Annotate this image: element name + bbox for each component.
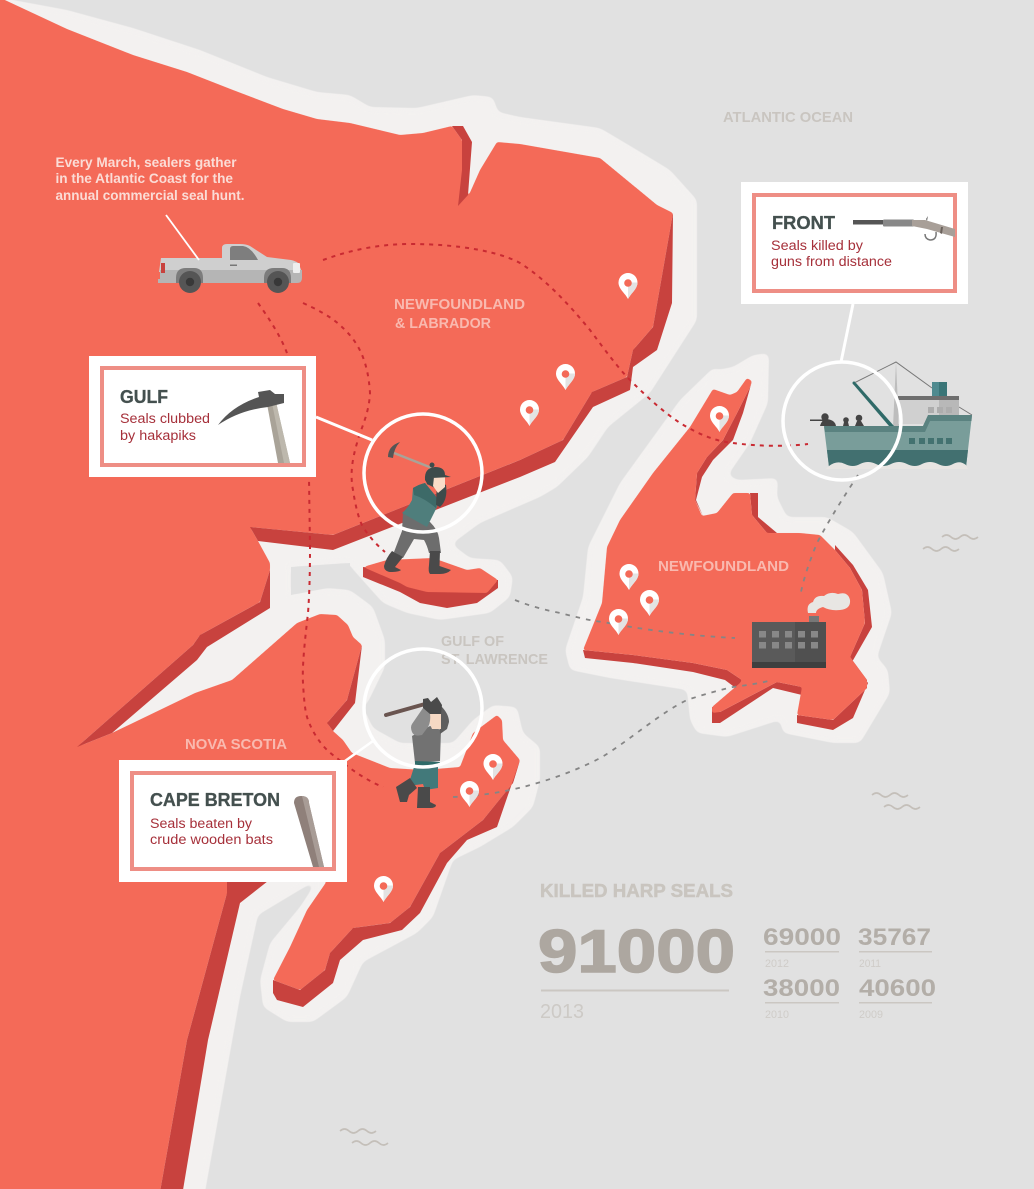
heading: KILLED HARP SEALS: [540, 881, 733, 901]
legs: [408, 764, 438, 790]
callout: Gulf: [89, 356, 316, 477]
figure: 2010: [763, 975, 840, 1021]
belt: [415, 761, 440, 766]
pin: [556, 364, 575, 390]
figure: 2009: 40600: [859, 975, 936, 1002]
description: [771, 238, 892, 269]
route: red to front: [323, 244, 808, 446]
smoke: [808, 593, 850, 613]
icon: rifle: [853, 216, 955, 240]
description: [150, 816, 273, 847]
pin: [620, 564, 638, 590]
heading: CAPE BRETON: [150, 790, 280, 810]
land edge shadows: mainland: [77, 126, 673, 1189]
intro text: in the Atlantic Coast for the: [56, 171, 233, 186]
pin: [609, 609, 628, 635]
figure: 2012: [763, 924, 841, 970]
route: grey island to factory: [515, 600, 735, 638]
hunters: [810, 413, 864, 426]
icon: hakapik: [218, 390, 290, 463]
leader: gulf: [316, 417, 372, 440]
boots: [396, 778, 436, 808]
pin: [710, 406, 729, 432]
intro text: [56, 155, 244, 203]
boots: [384, 551, 451, 574]
cabin: [898, 396, 959, 424]
pin: [460, 781, 479, 807]
pointer: intro to truck: [166, 215, 199, 260]
label: Newfoundland and Labrador: [394, 296, 525, 332]
route: grey boat to factory: [800, 475, 858, 597]
location pins: [374, 273, 729, 902]
intro text: Every March, sealers gather: [56, 155, 237, 170]
label: Gulf of St. Lawrence: [441, 633, 548, 668]
label: Atlantic Ocean: ATLANTIC OCEAN: [723, 109, 853, 126]
heading: FRONT: [772, 213, 835, 233]
description: Seals beaten by: [150, 816, 252, 831]
factory: [752, 593, 850, 668]
hull: [824, 415, 972, 469]
leader: front: [841, 304, 853, 362]
figure: 2012: 2012: [765, 958, 789, 970]
figure: 2011: 2011: [859, 958, 881, 970]
legs: [394, 512, 441, 558]
route: red to gulf: [303, 303, 385, 552]
focus circles and leader lines: [316, 304, 901, 767]
statistics: killed harp seals: [538, 881, 936, 1023]
description: [120, 411, 210, 443]
crane: [853, 383, 894, 426]
mainland: Labrador, Nova Scotia and Cape Breton: [0, 0, 673, 1189]
description: crude wooden bats: [150, 832, 273, 847]
region labels: [185, 109, 853, 753]
label: Newfoundland and Labrador: & LABRADOR: [395, 315, 491, 332]
rigging: [854, 362, 972, 415]
leader: Cape Breton: [345, 741, 373, 761]
figure: 2009: 2009: [859, 1009, 883, 1021]
figure: 2009: [859, 975, 936, 1021]
pin: [520, 400, 539, 426]
pin: [618, 273, 638, 299]
description: by hakapiks: [120, 428, 196, 443]
route: grey Cape Breton to factory: [453, 680, 772, 797]
arms and face: [411, 697, 449, 736]
figure: 2010: 38000: [763, 975, 840, 1002]
pin: [374, 876, 393, 902]
focus: Cape Breton: [364, 649, 482, 767]
intro text: annual commercial seal hunt.: [56, 188, 244, 203]
Newfoundland island: [583, 378, 872, 730]
torso: [412, 726, 441, 763]
callout: Cape Breton: [119, 760, 347, 882]
description: Seals clubbed: [120, 411, 210, 426]
sealer swinging bat: [386, 697, 449, 808]
hakapik: [388, 442, 432, 468]
label: Newfoundland and Labrador: NEWFOUNDLAND: [394, 296, 525, 313]
pin: [484, 754, 502, 780]
hair and cap: [425, 462, 451, 507]
jacket: [402, 483, 437, 527]
figure: 2011: 35767: [858, 924, 931, 951]
wooden bat: [386, 704, 425, 715]
label: Gulf of St. Lawrence: ST. LAWRENCE: [441, 651, 548, 668]
sealer swinging hakapik: [384, 442, 451, 574]
icon: wooden bat: [294, 796, 324, 867]
sealing ship: [810, 362, 972, 469]
label: Newfoundland: NEWFOUNDLAND: [658, 558, 789, 575]
dashed routes: [258, 244, 858, 797]
icon: pickup truck: [158, 244, 302, 293]
main figure: 2013: 91000: [538, 918, 735, 985]
callout: Front: [741, 182, 968, 304]
focus: front: [783, 362, 901, 480]
route: red to Cape Breton: [258, 303, 383, 787]
strait water: [291, 563, 350, 595]
chimney: [809, 616, 819, 623]
decorative waves: [340, 535, 978, 1145]
mast: [893, 362, 899, 427]
building: [752, 622, 826, 668]
label: Gulf of St. Lawrence: GULF OF: [441, 633, 504, 650]
main figure: 2013: 2013: [540, 1001, 584, 1023]
figure: 2012: 69000: [763, 924, 841, 951]
figure: 2011: [858, 924, 932, 970]
gulf island: [363, 558, 498, 608]
main figure: 2013: [538, 918, 735, 1023]
funnel: [932, 382, 947, 397]
figure: 2010: 2010: [765, 1009, 789, 1021]
focus: gulf: [364, 414, 482, 532]
label: Nova Scotia: NOVA SCOTIA: [185, 736, 287, 753]
description: Seals killed by: [771, 238, 863, 253]
pin: [640, 590, 659, 616]
description: guns from distance: [771, 254, 892, 269]
heading: GULF: [120, 387, 168, 407]
